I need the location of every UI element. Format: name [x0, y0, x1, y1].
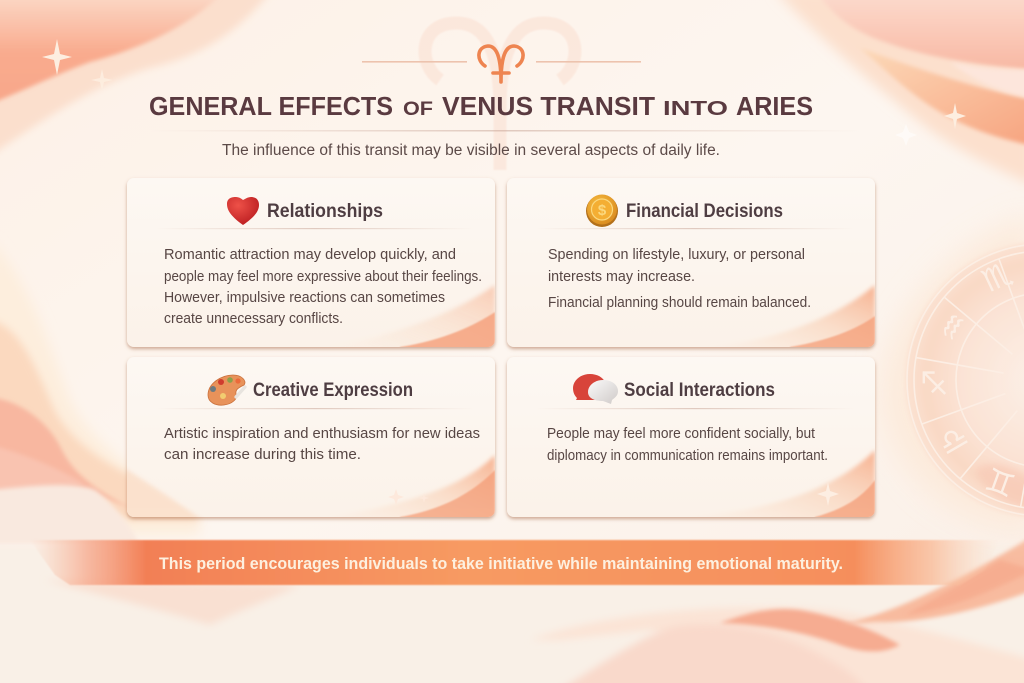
- panel: creative expression: [120, 357, 495, 522]
- title: OF: [403, 99, 433, 120]
- title: [149, 93, 813, 121]
- body text: Artistic inspiration and enthusiasm for new ideas: [164, 426, 480, 442]
- panel: social interactions: [507, 357, 875, 522]
- aries watermark: [425, 23, 575, 170]
- panel: financial decisions: [507, 178, 875, 352]
- body text: Romantic attraction may develop quickly, and: [164, 247, 456, 263]
- zodiac wheel watermark: ♎︎: [931, 416, 975, 464]
- bottom banner: [30, 540, 1000, 585]
- body text: People may feel more confident socially, but: [547, 426, 815, 442]
- heading: financial decisions: Financial Decisions: [626, 201, 783, 222]
- title: VENUS TRANSIT: [442, 93, 655, 121]
- icon: coin: [586, 194, 618, 227]
- heading: creative expression: Creative Expression: [253, 380, 413, 401]
- zodiac wheel watermark: ♊︎: [980, 460, 1020, 506]
- body text: [164, 426, 480, 463]
- panel: relationships: [127, 178, 495, 352]
- title: INTO: [663, 98, 728, 120]
- icon: heart: [227, 197, 259, 225]
- heading: social interactions: Social Interactions: [624, 380, 775, 401]
- body text: can increase during this time.: [164, 447, 361, 463]
- aries icon with flanking lines: [362, 46, 641, 82]
- body text: [547, 426, 828, 464]
- icon: coin: $: [598, 202, 607, 219]
- left waves: [0, 240, 200, 545]
- body text: [548, 247, 811, 311]
- zodiac wheel watermark: [880, 215, 1024, 530]
- body text: interests may increase.: [548, 269, 695, 285]
- body text: However, impulsive reactions can sometimes: [164, 290, 445, 306]
- lower waves: [0, 535, 1024, 683]
- body text: Financial planning should remain balanced.: [548, 295, 811, 311]
- title: GENERAL EFFECTS: [149, 93, 393, 121]
- top-right waves: [775, 0, 1024, 186]
- icon: speech bubbles: [573, 374, 618, 404]
- icon: palette: [208, 375, 245, 405]
- body text: Spending on lifestyle, luxury, or personal: [548, 247, 805, 263]
- banner text: This period encourages individuals to take initiative while maintaining emotional maturity.: [159, 554, 843, 573]
- top-left waves: [0, 0, 272, 156]
- subtitle: The influence of this transit may be visible in several aspects of daily life.: [222, 142, 720, 159]
- zodiac wheel watermark: ♒︎: [929, 305, 977, 349]
- body text: people may feel more expressive about their feelings.: [164, 269, 482, 285]
- body text: [164, 247, 482, 327]
- zodiac wheel watermark: ♐︎: [916, 369, 954, 397]
- title: ARIES: [736, 93, 813, 121]
- body text: diplomacy in communication remains important.: [547, 448, 828, 464]
- zodiac wheel watermark: ♏︎: [976, 254, 1018, 300]
- heading: relationships: Relationships: [267, 201, 383, 222]
- body text: create unnecessary conflicts.: [164, 311, 343, 327]
- sparkles: [42, 39, 966, 146]
